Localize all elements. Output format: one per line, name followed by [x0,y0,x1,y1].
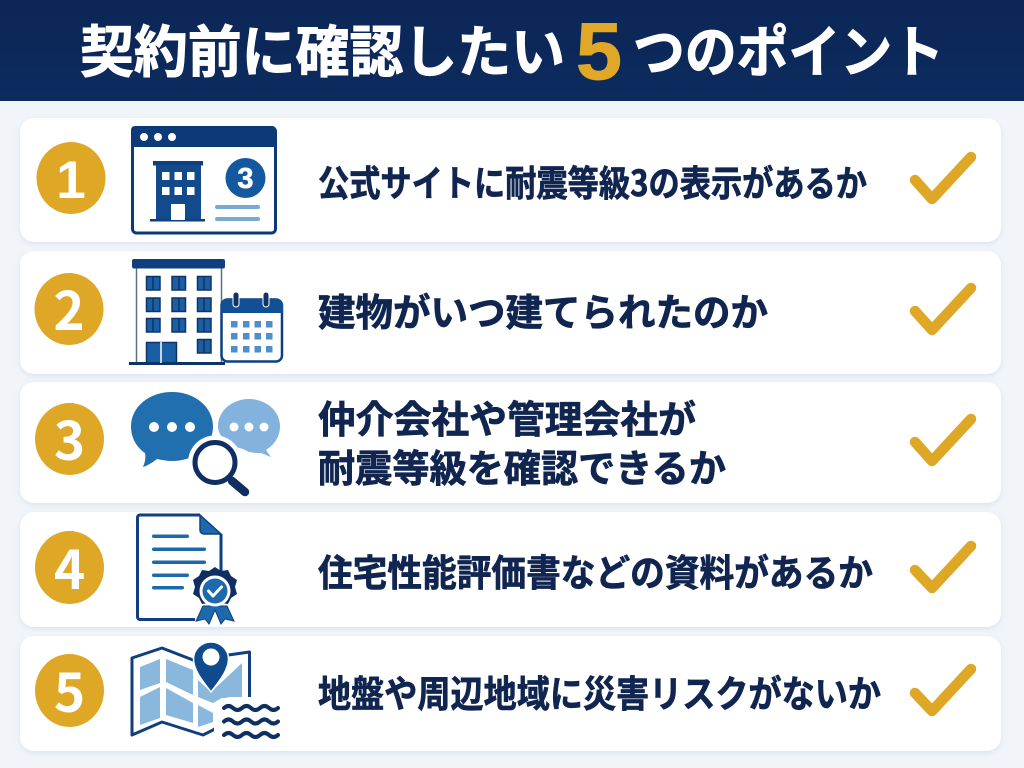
text 4: 住宅性能評価書などの資料があるか [318,543,873,597]
panel: point 1 [20,118,1001,242]
number badge 5 [35,652,104,728]
number badge 2 [34,270,104,346]
number badge 4 [35,529,104,605]
number badge 5: 5 [54,652,85,728]
number badge 1: 1 [56,151,86,210]
title: つのポイント [633,8,944,89]
text 2: 建物がいつ建てられたのか [318,282,768,337]
check mark 1 [915,157,971,199]
text 3 [318,389,726,493]
number badge 4: 4 [54,529,85,605]
text 3: 耐震等級を確認できるか [318,438,726,493]
icon: map with pin and water waves [132,642,278,742]
title: 契約前に確認したい [80,8,565,89]
check mark 5 [915,669,971,711]
number badge 2: 2 [53,270,85,346]
check mark 3 [915,419,971,461]
text 1: 公式サイトに耐震等級3の表示があるか [318,155,867,207]
number badge 3 [35,400,104,476]
check mark 4 [915,546,971,588]
icon: website with building and grade 3: 3 [237,163,254,195]
title: 5 [576,7,622,97]
icon: speech bubbles and magnifier [131,392,280,492]
icon: website with building and grade 3 [131,126,276,233]
panel: point 3 [20,382,1001,503]
header band [0,0,1024,101]
panel: point 5 [20,636,1001,751]
text 5: 地盤や周辺地域に災害リスクがないか [318,664,881,718]
check mark 2 [915,288,971,330]
icon: building and calendar [129,259,283,365]
title [80,7,944,97]
panel: point 2 [20,251,1001,374]
number badge 1 [36,142,106,214]
icon: document with certificate seal [138,515,237,624]
number badge 3: 3 [54,400,85,476]
panel: point 4 [20,512,1001,627]
text 3: 仲介会社や管理会社が [318,389,696,444]
